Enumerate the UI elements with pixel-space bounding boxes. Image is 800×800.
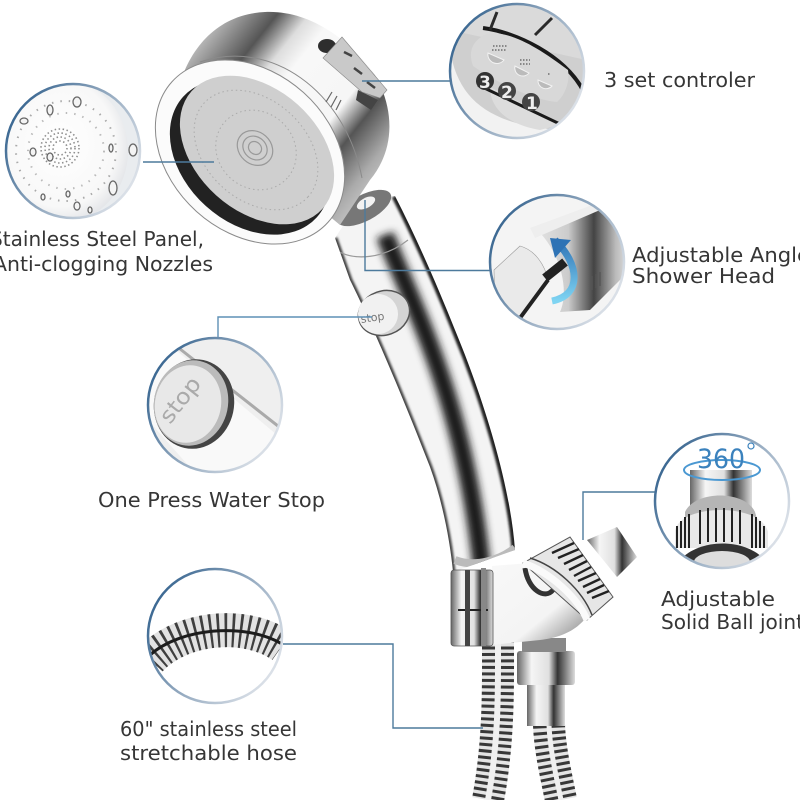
stop button [352, 283, 416, 343]
label: stop: One Press Water Stop [98, 488, 325, 512]
connector: ball joint [583, 492, 655, 540]
label: hose [120, 717, 297, 765]
hose fitting [517, 638, 575, 726]
label: hose: 60" stainless steel [120, 717, 297, 741]
label: ball joint: Adjustable [661, 587, 775, 611]
connector: stop [218, 317, 372, 337]
angle circle [490, 195, 630, 331]
label: ball joint [661, 587, 800, 634]
label: hose: stretchable hose [120, 741, 297, 765]
ring inner dark [139, 48, 361, 266]
connector: angle [365, 200, 490, 270]
ball joint circle: 360 [697, 444, 745, 475]
wall bracket cradle [451, 563, 590, 646]
mode marks [326, 92, 341, 110]
label: angle: Shower Head [632, 264, 775, 288]
connector: panel [143, 161, 214, 163]
connector: controller [362, 80, 450, 82]
controller circle: 1 [526, 94, 538, 114]
spray panel [151, 46, 363, 254]
label: ball joint: Solid Ball joint [661, 610, 800, 634]
left hose [488, 640, 498, 800]
ball joint circle [655, 434, 791, 575]
shower head body [178, 12, 389, 225]
label: controller: 3 set controler [604, 68, 756, 92]
shower head ring [118, 22, 382, 282]
label: angle: Adjustable Angle [632, 243, 800, 267]
ball joint cap [587, 527, 637, 577]
controller circle: 2 [501, 83, 513, 103]
stop circle: stop [155, 372, 207, 429]
hose circle [148, 568, 283, 704]
lever slot [318, 39, 336, 53]
label: angle [632, 243, 800, 288]
stop button: stop [360, 310, 385, 326]
controller circle [450, 3, 586, 140]
stop circle [146, 338, 283, 473]
head seam [200, 56, 362, 178]
handle [335, 196, 515, 572]
controller circle: 3 [479, 73, 491, 93]
panel circle: spray face [4, 81, 141, 221]
knurled nut [523, 537, 613, 620]
neck joint [331, 182, 397, 234]
right hose [549, 725, 561, 800]
label: panel [0, 227, 213, 276]
connector: hose [283, 644, 483, 728]
mode lever [323, 37, 387, 110]
